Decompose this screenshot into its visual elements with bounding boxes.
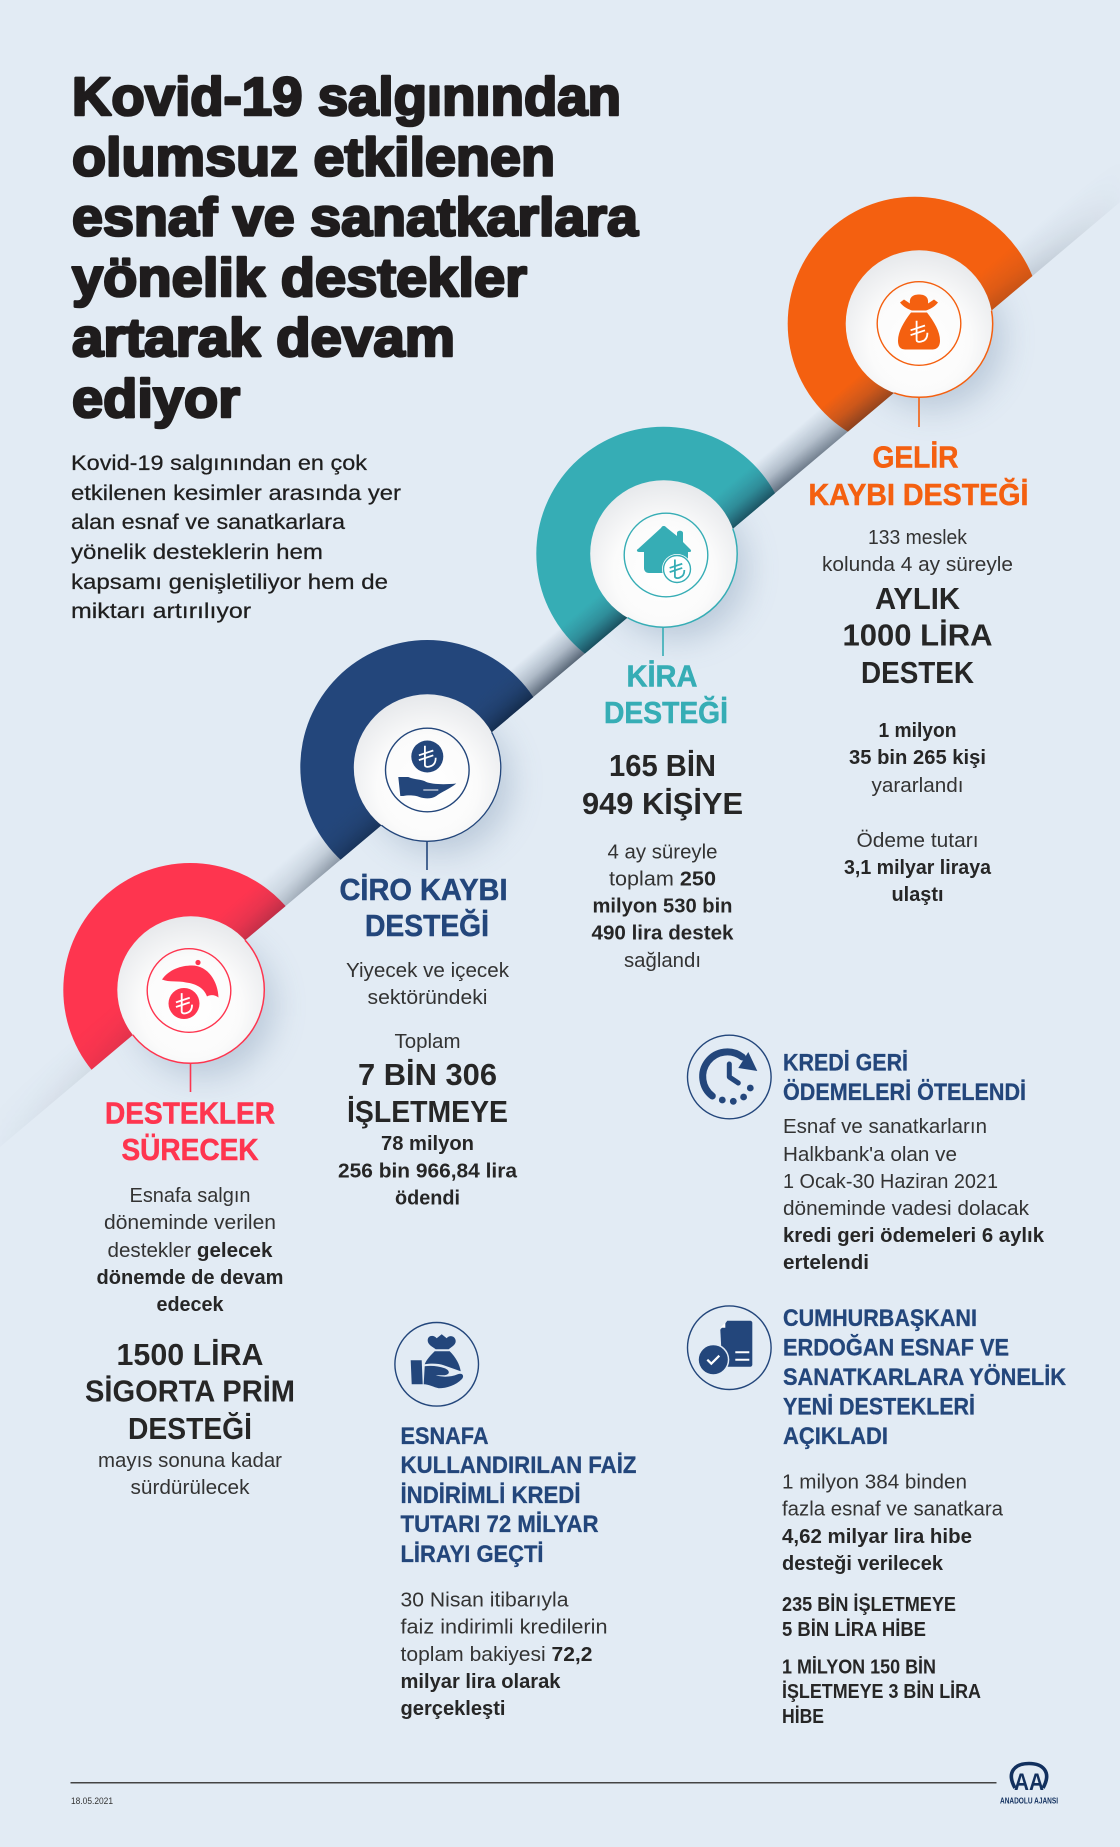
text block bbox=[346, 959, 510, 1053]
panel: ciro kaybı desteği bbox=[300, 640, 534, 1204]
text block bbox=[592, 840, 734, 972]
text block: döneminde verilen bbox=[104, 1211, 276, 1234]
text block: milyon 530 bin bbox=[592, 894, 732, 918]
diagonal ribbon shadow bbox=[0, 124, 1120, 1198]
heading bbox=[808, 440, 1028, 512]
beneficiaries text: 1 milyon bbox=[878, 719, 956, 742]
grant item: 5 bin lira: 5 BİN LİRA HİBE bbox=[782, 1618, 926, 1641]
key figure: sigorta prim: SİGORTA PRİM bbox=[85, 1374, 295, 1408]
heading bbox=[340, 872, 508, 943]
text block: destekler gelecek bbox=[108, 1239, 273, 1262]
heading: SÜRECEK bbox=[122, 1132, 259, 1167]
text block: toplam 250 bbox=[609, 868, 716, 890]
text block: sektöründeki bbox=[368, 986, 488, 1009]
note: mayıs sonuna kadar bbox=[98, 1449, 282, 1472]
text block: kredi geri ödemeleri 6 aylık bbox=[783, 1224, 1045, 1247]
key figure: kişi: 949 KİŞİYE bbox=[582, 786, 743, 821]
grant item: 3 bin lira: HİBE bbox=[782, 1705, 824, 1728]
intro text: etkilenen kesimler arasında yer bbox=[71, 481, 401, 505]
key figure: aylık destek: DESTEK bbox=[861, 655, 975, 690]
icon: clock with arrow bbox=[688, 1035, 771, 1119]
heading: ERDOĞAN ESNAF VE bbox=[783, 1334, 1009, 1362]
text block: ertelendi bbox=[783, 1251, 869, 1274]
heading: AÇIKLADI bbox=[783, 1423, 888, 1450]
payment text: 3,1 milyar liraya bbox=[844, 856, 992, 879]
intro text: miktarı artırılıyor bbox=[71, 599, 251, 623]
heading: TUTARI 72 MİLYAR bbox=[400, 1511, 598, 1538]
icon: house with lira coin bbox=[624, 513, 708, 597]
key figure: sigorta prim: DESTEĞİ bbox=[128, 1411, 252, 1446]
key figure: aylık destek: 1000 LİRA bbox=[842, 618, 992, 652]
heading: DESTEĞİ bbox=[604, 695, 728, 730]
key figure: sigorta prim: 1500 LİRA bbox=[116, 1337, 264, 1372]
intro text: Kovid-19 salgınından en çok bbox=[71, 451, 367, 475]
payment text: 78 milyon bbox=[381, 1132, 474, 1155]
key figure: kişi: 165 BİN bbox=[609, 748, 716, 783]
payment text: 256 bin 966,84 lira bbox=[338, 1160, 518, 1182]
panel: kredi geri ödemeleri bbox=[688, 1035, 1045, 1274]
heading: DESTEKLER bbox=[105, 1096, 275, 1130]
text block: kolunda 4 ay süreyle bbox=[822, 553, 1013, 576]
key figure: aylık destek: AYLIK bbox=[875, 581, 961, 616]
text block: 4 ay süreyle bbox=[608, 840, 718, 864]
text block bbox=[400, 1588, 608, 1720]
intro text: alan esnaf ve sanatkarlara bbox=[71, 510, 345, 534]
logo: Anadolu Ajansı: ANADOLU AJANSI bbox=[1000, 1796, 1058, 1806]
panel: yeni destekler bbox=[688, 1305, 1067, 1728]
intro text: kapsamı genişletiliyor hem de bbox=[71, 570, 388, 594]
intro text bbox=[71, 451, 401, 623]
heading: SANATKARLARA YÖNELİK bbox=[783, 1364, 1067, 1391]
panel: kira desteği bbox=[536, 426, 775, 971]
heading: CİRO KAYBI bbox=[340, 872, 508, 907]
heading bbox=[783, 1050, 1026, 1106]
logo: Anadolu Ajansı: AA bbox=[1014, 1769, 1044, 1796]
heading: YENİ DESTEKLERİ bbox=[783, 1394, 975, 1420]
heading: KAYBI DESTEĞİ bbox=[808, 477, 1028, 512]
medallion: orange arc bbox=[788, 196, 1032, 432]
heading bbox=[400, 1423, 636, 1568]
heading: DESTEĞİ bbox=[365, 908, 489, 943]
grant item: 5 bin lira bbox=[782, 1593, 956, 1641]
heading bbox=[783, 1305, 1067, 1450]
icon: hand with money bag bbox=[395, 1322, 478, 1406]
text block: Esnafa salgın bbox=[130, 1184, 250, 1207]
icon: hand with lira coin bbox=[386, 728, 469, 812]
medallion: navy arc bbox=[300, 640, 534, 870]
title: esnaf ve sanatkarlara bbox=[72, 188, 639, 248]
title: yönelik destekler bbox=[72, 248, 527, 308]
heading bbox=[105, 1096, 275, 1167]
text block: 1 Ocak-30 Haziran 2021 bbox=[783, 1170, 998, 1193]
text block: desteği verilecek bbox=[782, 1552, 944, 1575]
footer rule bbox=[70, 1782, 996, 1784]
text block: 30 Nisan itibarıyla bbox=[400, 1588, 569, 1612]
panel: faiz indirimli kredi bbox=[395, 1322, 636, 1720]
key figure: işletme bbox=[347, 1057, 508, 1129]
note bbox=[98, 1449, 282, 1499]
key figure: işletme: 7 BİN 306 bbox=[358, 1057, 497, 1092]
title: ediyor bbox=[72, 369, 240, 429]
heading: KREDİ GERİ bbox=[783, 1050, 908, 1076]
text block: fazla esnaf ve sanatkara bbox=[782, 1498, 1004, 1520]
medallion: teal arc bbox=[536, 426, 775, 656]
key figure: aylık destek bbox=[842, 581, 992, 690]
heading: KİRA bbox=[626, 658, 698, 694]
text block: 4,62 milyar lira hibe bbox=[782, 1525, 972, 1548]
text block bbox=[96, 1184, 284, 1316]
key figure: sigorta prim bbox=[85, 1337, 295, 1446]
text block: Esnaf ve sanatkarların bbox=[783, 1115, 987, 1138]
heading: ÖDEMELERİ ÖTELENDİ bbox=[783, 1079, 1026, 1106]
panel: destekler sürecek bbox=[63, 863, 294, 1494]
key figure: işletme: İŞLETMEYE bbox=[347, 1094, 508, 1129]
text block: milyar lira olarak bbox=[400, 1670, 561, 1693]
beneficiaries text: 35 bin 265 kişi bbox=[849, 746, 986, 769]
heading: ESNAFA bbox=[400, 1423, 488, 1450]
beneficiaries text: yararlandı bbox=[872, 774, 964, 797]
text block: döneminde vadesi dolacak bbox=[783, 1197, 1030, 1220]
heading: CUMHURBAŞKANI bbox=[783, 1305, 977, 1332]
text block: sağlandı bbox=[624, 949, 701, 972]
text block: 490 lira destek bbox=[592, 922, 734, 944]
beneficiaries text bbox=[849, 719, 986, 797]
title: Kovid-19 salgınından bbox=[72, 67, 621, 127]
payment text: ulaştı bbox=[892, 883, 944, 906]
panel: gelir kaybı desteği bbox=[788, 196, 1032, 905]
text block: gerçekleşti bbox=[400, 1697, 506, 1720]
heading: LİRAYI GEÇTİ bbox=[400, 1541, 544, 1568]
grant item: 3 bin lira: İŞLETMEYE 3 BİN LİRA bbox=[782, 1680, 981, 1703]
logo: Anadolu Ajansı bbox=[1000, 1764, 1058, 1806]
date: 18.05.2021 bbox=[71, 1796, 113, 1806]
grant item: 3 bin lira bbox=[782, 1656, 981, 1728]
payment text bbox=[338, 1132, 518, 1210]
icon: document with check bbox=[688, 1306, 771, 1390]
grant item: 5 bin lira: 235 BİN İŞLETMEYE bbox=[782, 1593, 956, 1616]
intro text: yönelik desteklerin hem bbox=[71, 540, 323, 564]
heading: İNDİRİMLİ KREDİ bbox=[400, 1482, 580, 1509]
title: artarak devam bbox=[72, 308, 455, 368]
grant item: 3 bin lira: 1 MİLYON 150 BİN bbox=[782, 1656, 936, 1678]
payment text: ödendi bbox=[395, 1186, 460, 1210]
medallion: red arc bbox=[63, 863, 286, 1092]
text block bbox=[782, 1470, 1004, 1575]
text block: Toplam bbox=[394, 1030, 460, 1053]
text block: Halkbank'a olan ve bbox=[783, 1143, 957, 1166]
text block bbox=[822, 526, 1013, 576]
note: sürdürülecek bbox=[130, 1476, 250, 1499]
text block: toplam bakiyesi 72,2 bbox=[400, 1643, 592, 1666]
heading: GELİR bbox=[872, 440, 958, 474]
heading bbox=[604, 658, 728, 730]
title bbox=[72, 67, 639, 429]
key figure: kişi bbox=[582, 748, 743, 821]
payment text: Ödeme tutarı bbox=[856, 829, 978, 852]
text block: dönemde de devam bbox=[96, 1266, 284, 1289]
text block: 133 meslek bbox=[868, 526, 968, 549]
text block: 1 milyon 384 binden bbox=[782, 1470, 967, 1494]
text block bbox=[783, 1115, 1045, 1274]
icon: money bag with lira bbox=[877, 282, 961, 365]
text block: faiz indirimli kredilerin bbox=[400, 1616, 608, 1638]
icon: umbrella over lira coin bbox=[147, 949, 231, 1032]
heading: KULLANDIRILAN FAİZ bbox=[400, 1452, 636, 1479]
text block: Yiyecek ve içecek bbox=[346, 959, 510, 982]
text block: edecek bbox=[156, 1293, 224, 1316]
payment text bbox=[844, 829, 992, 906]
title: olumsuz etkilenen bbox=[72, 128, 555, 188]
